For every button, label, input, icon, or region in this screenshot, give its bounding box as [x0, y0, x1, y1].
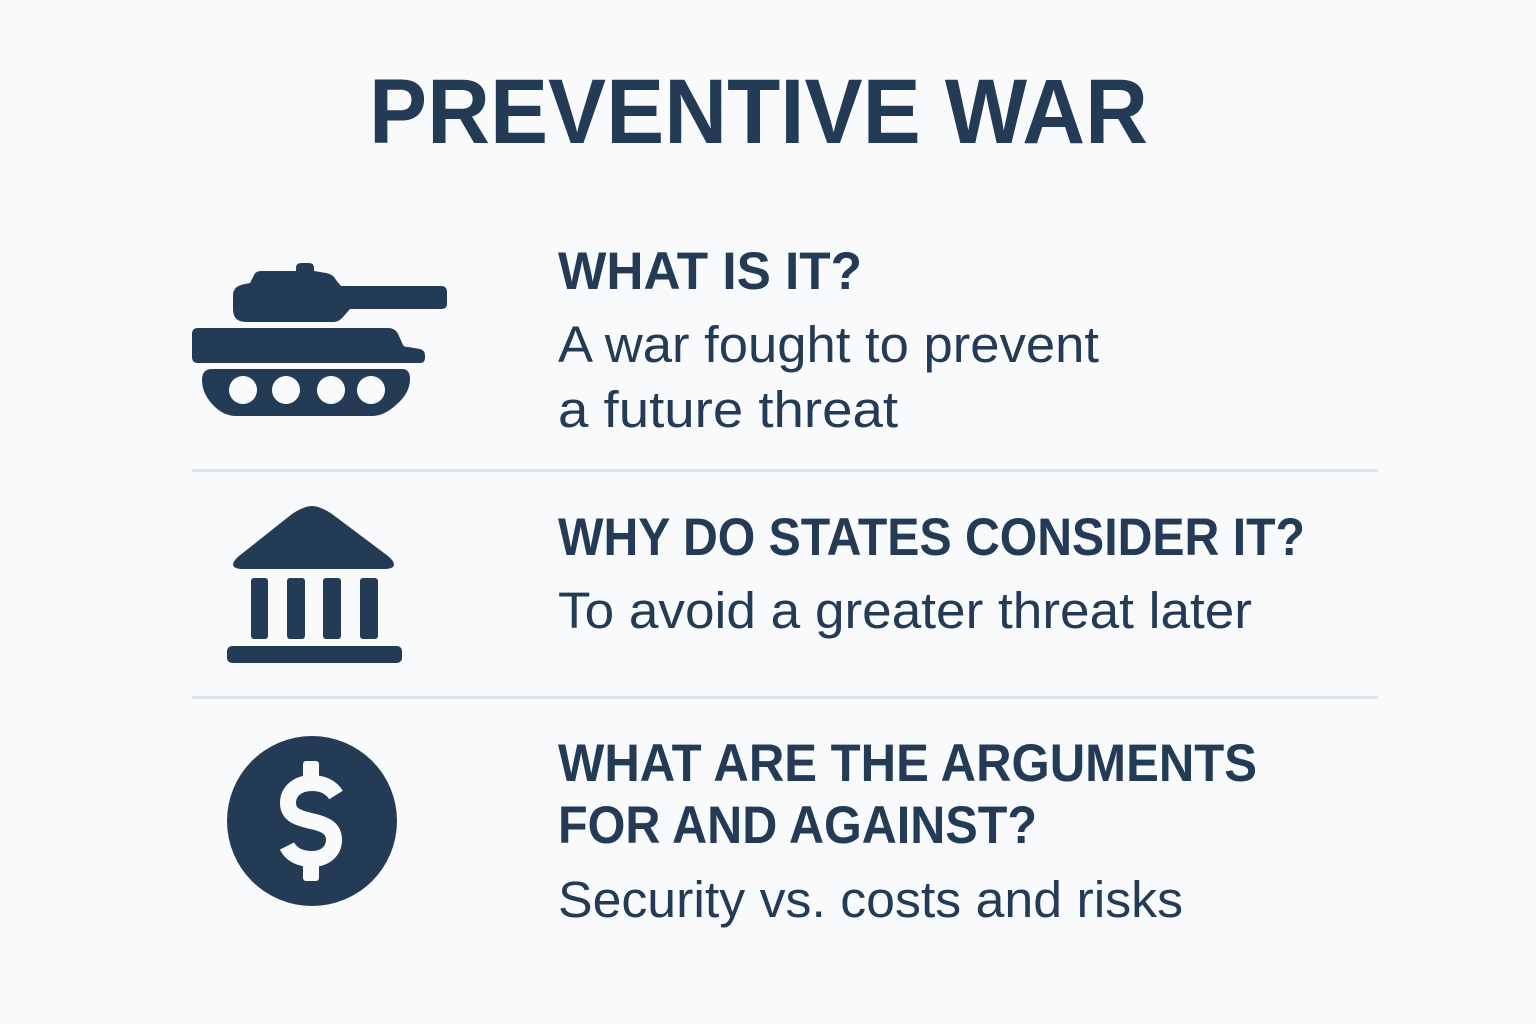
- heading: what is it: WHAT IS IT?: [558, 242, 862, 301]
- icon: government building: [227, 506, 402, 663]
- heading: arguments for and against: WHAT ARE THE ARGUMENTS: [558, 734, 1257, 793]
- heading: arguments for and against: FOR AND AGAINST?: [558, 796, 1037, 855]
- body: what is it: a future threat: [558, 381, 898, 438]
- body: why do states consider it: To avoid a greater threat later: [558, 582, 1252, 639]
- panel: what is it: [192, 242, 1099, 438]
- body: arguments for and against: Security vs. costs and risks: [558, 871, 1183, 928]
- heading: why do states consider it: WHY DO STATES CONSIDER IT?: [558, 508, 1305, 567]
- icon: dollar coin: [227, 736, 397, 906]
- panel: arguments for and against: [227, 734, 1257, 928]
- title: PREVENTIVE WAR: [369, 61, 1148, 163]
- icon: tank: [192, 263, 447, 416]
- panel: why do states consider it: [227, 506, 1305, 663]
- body: what is it: A war fought to prevent: [558, 316, 1099, 373]
